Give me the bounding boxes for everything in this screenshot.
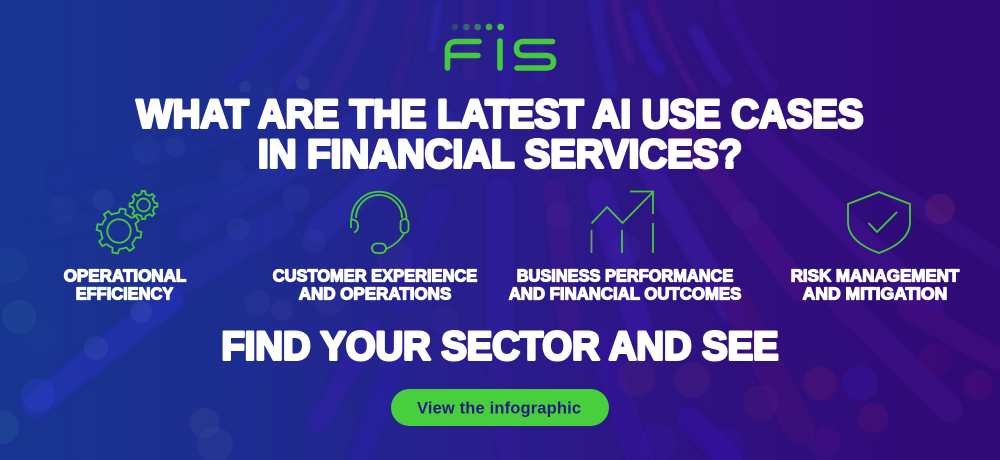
title: [136, 93, 864, 177]
title: WHAT ARE THE LATEST AI USE CASES: [136, 93, 864, 137]
icon: growth chart: [592, 192, 653, 253]
label: risk management and mitigation: RISK MANAGEMENT: [791, 265, 960, 285]
panel: business performance: [509, 192, 741, 303]
panel: operational efficiency: [64, 191, 187, 303]
logo dots: [452, 24, 504, 30]
label: risk management and mitigation: [791, 265, 960, 303]
label: customer experience and operations: CUSTOMER EXPERIENCE: [273, 265, 477, 285]
logo: FIS: [448, 24, 554, 68]
label: operational efficiency: EFFICIENCY: [76, 283, 174, 303]
icon: headset: [351, 192, 408, 253]
icon: gears: [92, 191, 158, 258]
label: customer experience and operations: [273, 265, 477, 303]
title: IN FINANCIAL SERVICES?: [258, 133, 742, 177]
panel: risk management: [791, 192, 960, 303]
label: business performance and financial outcomes: [509, 265, 741, 303]
button: view the infographic: [391, 389, 609, 426]
button: view the infographic: View the infographic: [417, 400, 581, 418]
panel: customer experience: [273, 192, 477, 303]
label: business performance and financial outcomes: BUSINESS PERFORMANCE: [517, 265, 733, 285]
label: operational efficiency: OPERATIONAL: [64, 265, 187, 285]
logo letterforms: [448, 41, 554, 68]
icon: shield with check: [848, 192, 910, 253]
label: risk management and mitigation: AND MITIGATION: [803, 283, 947, 303]
label: customer experience and operations: AND OPERATIONS: [299, 283, 451, 303]
label: operational efficiency: [64, 265, 187, 303]
label: business performance and financial outcomes: AND FINANCIAL OUTCOMES: [509, 283, 741, 303]
subheading: FIND YOUR SECTOR AND SEE: [222, 325, 778, 369]
